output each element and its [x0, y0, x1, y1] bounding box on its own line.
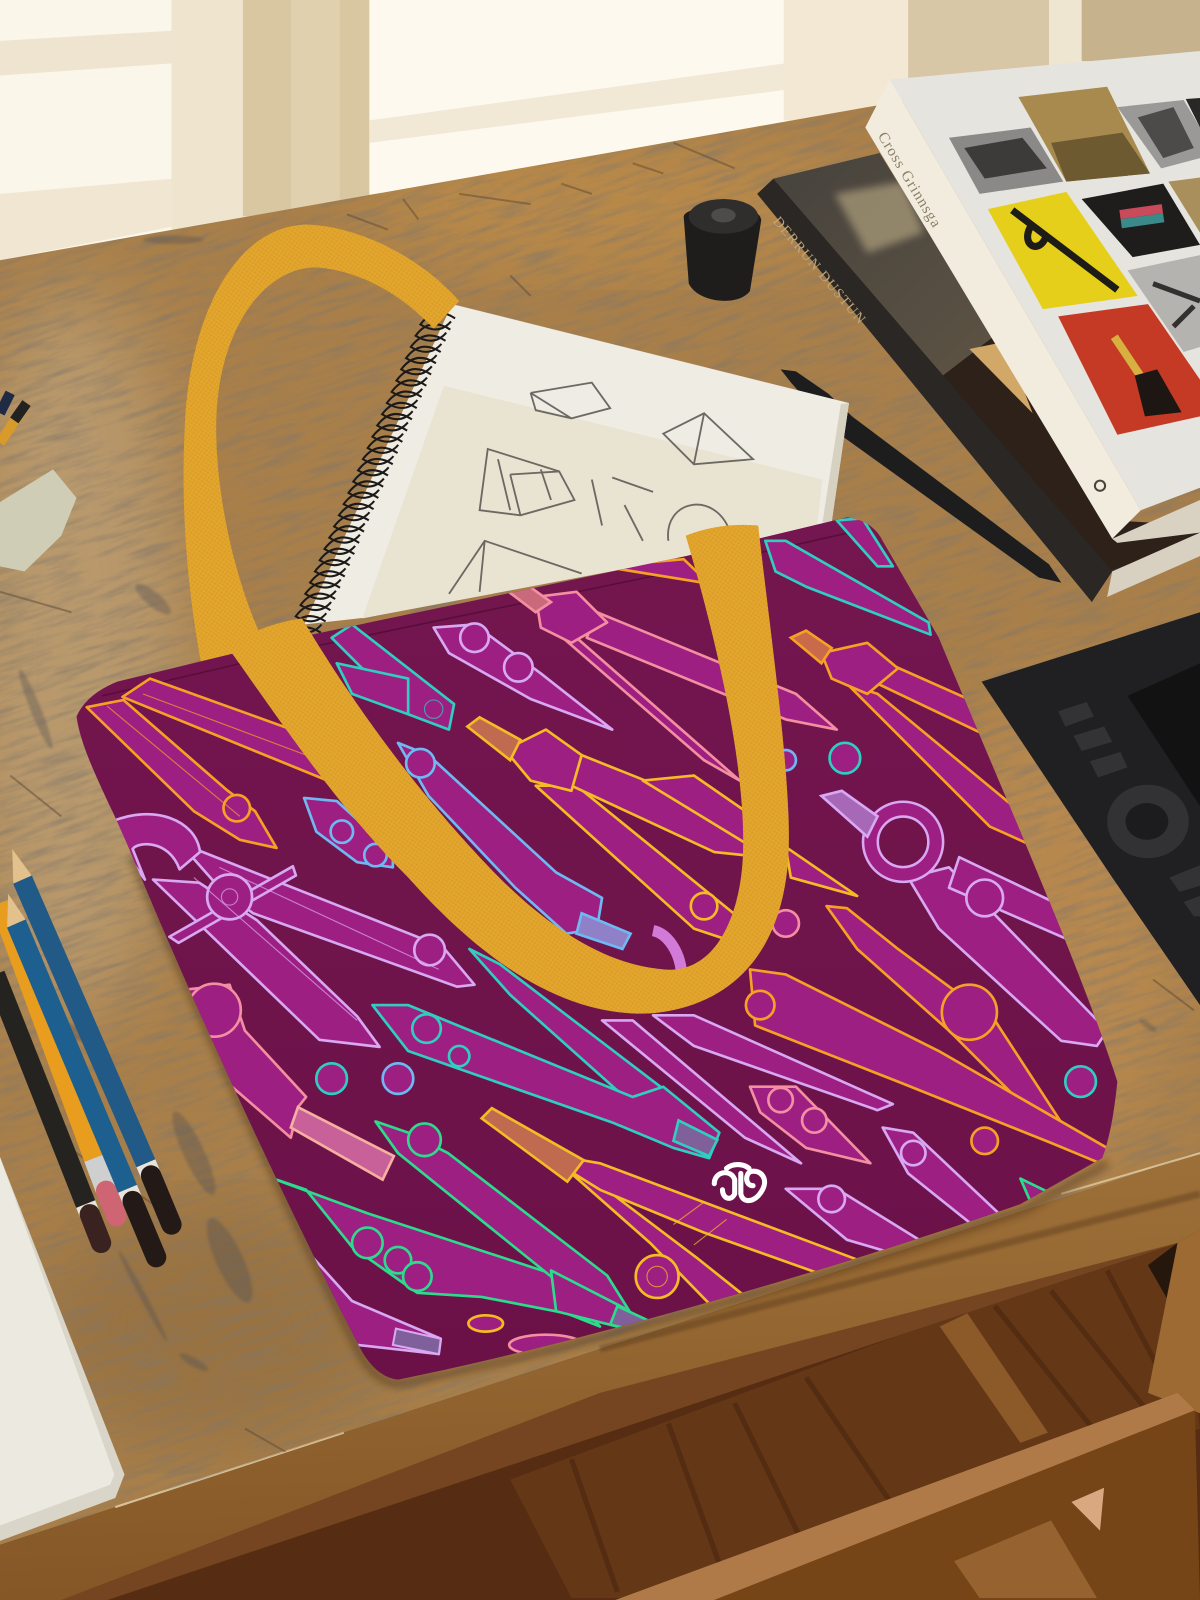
compass: pink top [502, 584, 837, 781]
underside strip [61, 1243, 1178, 1600]
short pencils top left [0, 393, 27, 443]
paper stack bottom left [0, 1157, 124, 1541]
tote bag body [77, 517, 1117, 1384]
black book tan corner [969, 342, 1033, 413]
tablet dial [1107, 785, 1189, 858]
tablet buttons [1058, 702, 1200, 916]
pink hook [653, 931, 682, 978]
cover picture: grey fabric [1117, 100, 1200, 168]
spine title: Cross Grinnsga [874, 129, 945, 231]
cover picture: dark corner [1186, 98, 1200, 128]
compass: lilac bottom left [306, 1250, 441, 1354]
compass: green bottom [267, 1121, 661, 1335]
cover picture: tan photo [1168, 178, 1200, 233]
pen: cyan small [304, 798, 393, 867]
blue pencil back [12, 849, 171, 1224]
page edge [822, 403, 849, 522]
white logo on the bag [714, 1165, 765, 1201]
drawer centre beam [940, 1313, 1048, 1443]
compass: blue centre [398, 743, 631, 949]
background: bright window [0, 0, 1200, 265]
drawer planks [571, 1270, 1163, 1592]
compass pattern [87, 518, 1107, 1355]
cover picture: yellow with black tool [988, 192, 1138, 309]
back page [304, 304, 849, 624]
right post [1148, 1230, 1200, 1413]
compass: cyan middle [372, 949, 719, 1158]
bag contact shadow [133, 857, 1107, 1384]
black book [757, 153, 1200, 602]
lower right frame [714, 1410, 1200, 1600]
drawing tablet [982, 612, 1200, 1005]
pencil sketches [449, 383, 753, 594]
pattern dots [316, 743, 1096, 1355]
cover picture: gold photo [1018, 87, 1150, 182]
tablet active area [1128, 663, 1200, 806]
table front edge [0, 1153, 1200, 1600]
white book [865, 51, 1200, 543]
blue pencil front [7, 894, 156, 1257]
drawer front rail [615, 1393, 1195, 1600]
cover picture: grey tool [1128, 255, 1200, 352]
compass: teal top right [602, 518, 931, 635]
cover picture: grey photo [949, 128, 1063, 194]
black book tan patch [835, 182, 923, 253]
compass: teal small [332, 624, 454, 730]
top seam [102, 529, 867, 696]
dark wear on the edge [600, 1194, 1200, 1349]
drawer interior lit area [510, 1243, 1200, 1598]
yellow pencil [0, 903, 116, 1216]
publisher mark on spine [1095, 481, 1105, 491]
front sketch sheet [362, 386, 822, 618]
black book spine title: DERRUN DUSTUN [769, 214, 869, 328]
highlight crack along the edge [115, 1153, 1200, 1507]
open drawer and floor below the table [0, 1143, 1200, 1600]
eraser [0, 469, 77, 571]
spiral binding [286, 313, 455, 644]
compass: orange right [791, 631, 1031, 845]
black stylus pen [781, 369, 1061, 583]
front handle of tote [228, 525, 789, 1014]
bag fabric [77, 517, 1117, 1380]
pen: pink lilac [434, 623, 612, 730]
compass: orange top left [87, 679, 333, 848]
compass: lilac left [112, 814, 474, 1047]
compass: lilac middle [602, 1015, 893, 1163]
compass: pink right [821, 791, 1107, 1046]
white book pages [1112, 500, 1200, 543]
black book lower wood tones [934, 332, 1200, 571]
pen: pink small [750, 1087, 870, 1163]
white book cover [890, 51, 1200, 510]
black cylinder cap [684, 199, 761, 301]
spiral notebook [286, 304, 849, 644]
pencil group bottom left [0, 849, 171, 1257]
lower planks [954, 1520, 1097, 1598]
cover picture: red with statuette [1058, 304, 1200, 435]
compass: pink left [184, 984, 394, 1180]
black book pages [1107, 533, 1200, 597]
light triangle [1071, 1488, 1104, 1531]
compass: yellow centre [467, 717, 857, 944]
black pencil [0, 974, 101, 1243]
compass: yellow bottom [480, 1106, 857, 1303]
dark gap at the back [1148, 1243, 1178, 1301]
white book spine [865, 80, 1141, 539]
black book cover with photo [773, 153, 1200, 571]
back handle of tote [184, 224, 459, 668]
black book spine [757, 179, 1112, 602]
compass: orange bottom right [746, 906, 1107, 1165]
cover picture: black with colour stack [1082, 184, 1200, 257]
compass: lilac bottom right [784, 1126, 1046, 1251]
